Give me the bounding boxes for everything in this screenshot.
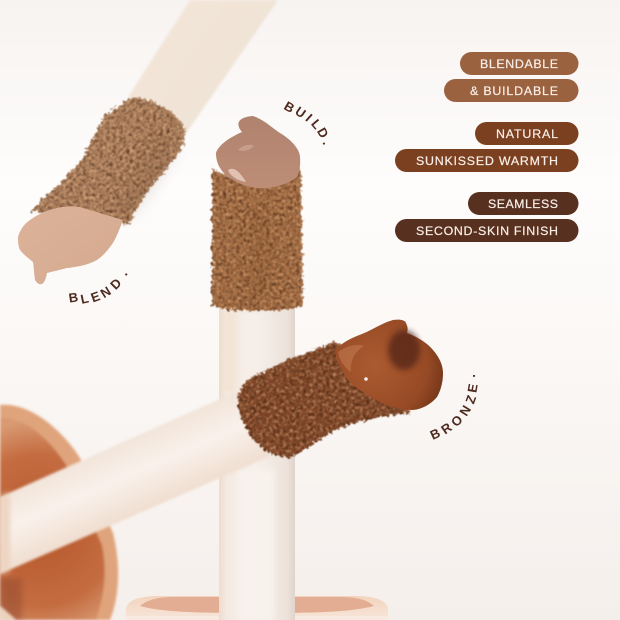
bronze applicator: fuzzy tip [238, 342, 410, 457]
curved label: bronze: B [428, 425, 443, 443]
bronze applicator: product dollop [335, 320, 443, 410]
curved label: bronze: E [464, 382, 481, 394]
curved label: blend: N [98, 283, 114, 301]
curved label: blend: B [68, 289, 79, 306]
pill: second-skin finish: SECOND-SKIN FINISH [416, 224, 558, 238]
curved label: bronze: N [456, 403, 474, 419]
curved label: build: L [308, 116, 325, 132]
pill: and buildable: & BUILDABLE [470, 84, 558, 98]
top-left wand handle [128, 0, 278, 135]
curved label: blend: D [107, 275, 124, 292]
curved label: build: D [314, 125, 332, 141]
pill: seamless [468, 192, 578, 215]
angled wand handle, blurred [0, 390, 270, 574]
pill: and buildable [444, 79, 578, 102]
curved label: build [281, 98, 335, 147]
pill: natural [475, 122, 578, 145]
pill: blendable: BLENDABLE [480, 57, 558, 71]
jar rim at the bottom [126, 596, 388, 620]
pill: sunkissed warmth [395, 149, 578, 172]
curved label: build: I [303, 111, 315, 124]
curved label: bronze: O [448, 412, 466, 430]
curved label: bronze: Z [462, 393, 479, 406]
curved label: build: U [292, 103, 309, 121]
pill: blendable [460, 52, 578, 75]
curved label: blend: L [79, 290, 90, 307]
vertical wand handle [219, 300, 295, 620]
curved label: bronze: R [438, 419, 455, 437]
curved label: blend: E [89, 288, 102, 305]
compact cap, blurred, left edge [0, 405, 118, 620]
middle applicator: product dollop [216, 116, 300, 188]
pill: seamless: SEAMLESS [488, 197, 558, 211]
middle applicator: fuzzy tip [212, 168, 303, 311]
curved label: build: B [281, 98, 297, 116]
curved label: blend [68, 267, 130, 307]
pill: sunkissed warmth: SUNKISSED WARMTH [416, 154, 558, 168]
pill: natural: NATURAL [496, 127, 558, 141]
left applicator: product dollop [18, 206, 123, 284]
curved label: bronze [428, 374, 481, 443]
curved label: bronze: . [463, 374, 478, 378]
left applicator: fuzzy tip [30, 98, 185, 225]
pill: second-skin finish [395, 219, 578, 242]
curved label: blend: . [116, 267, 130, 278]
curved label: build: . [320, 138, 335, 147]
